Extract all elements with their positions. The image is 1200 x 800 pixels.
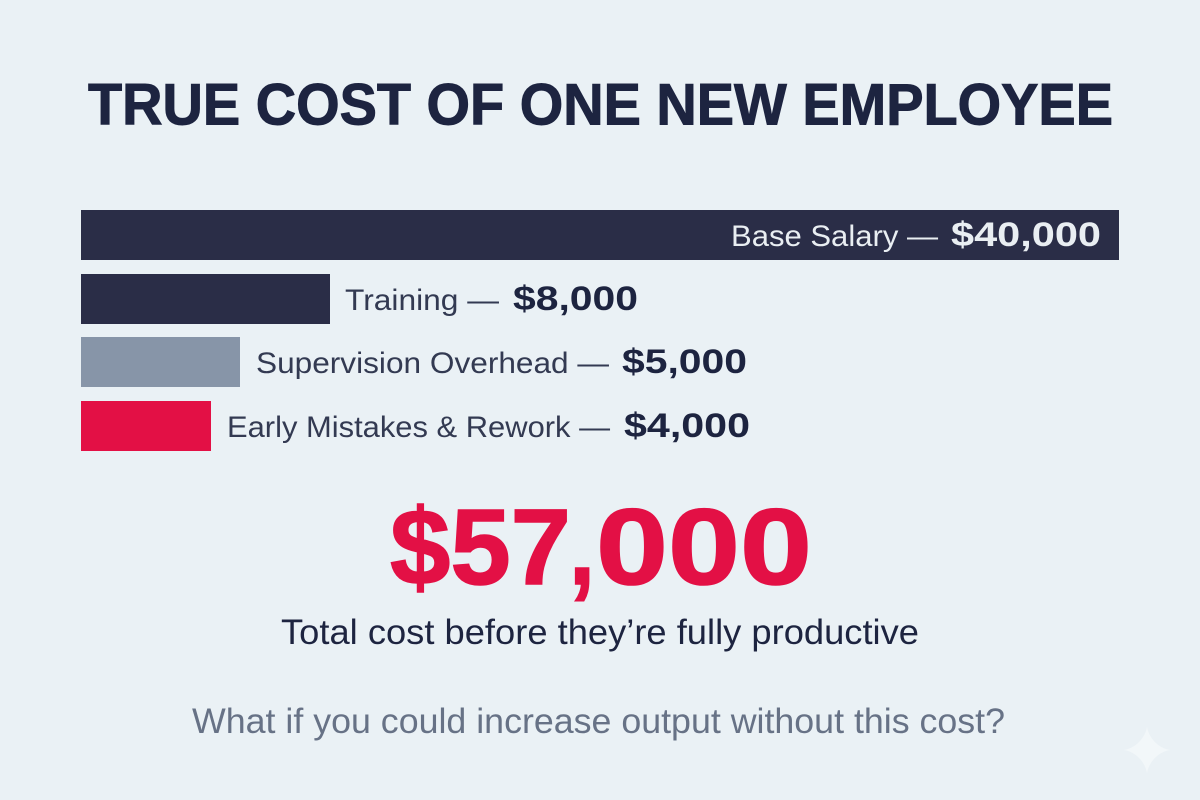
bar: base salary: Base Salary — — [731, 220, 938, 253]
total cost caption: Total cost before they’re fully productive — [281, 613, 919, 652]
bar: base salary — [81, 210, 1119, 260]
total cost figure: 000 — [596, 486, 812, 607]
closing question: What if you could increase output without this cost? — [192, 702, 1005, 741]
title: TRUE COST OF ONE NEW EMPLOYEE — [88, 72, 1113, 138]
bar: supervision overhead: $5,000 — [622, 343, 747, 381]
bar: training: $8,000 — [513, 280, 638, 318]
bar chart: cost breakdown — [81, 210, 1119, 451]
bar: training — [81, 274, 638, 324]
icon: sparkle — [1124, 727, 1170, 773]
bar: early mistakes and rework: $4,000 — [624, 407, 750, 445]
total cost figure: $57 — [390, 486, 571, 607]
total cost figure: , — [569, 486, 595, 607]
bar: early mistakes and rework — [81, 401, 750, 451]
bar: training: Training — — [345, 284, 499, 317]
bar: base salary: $40,000 — [951, 216, 1101, 254]
bar: supervision overhead — [81, 337, 747, 387]
bar: supervision overhead: Supervision Overhead — — [256, 347, 609, 380]
bar: early mistakes and rework: Early Mistakes & Rework — — [227, 411, 610, 444]
